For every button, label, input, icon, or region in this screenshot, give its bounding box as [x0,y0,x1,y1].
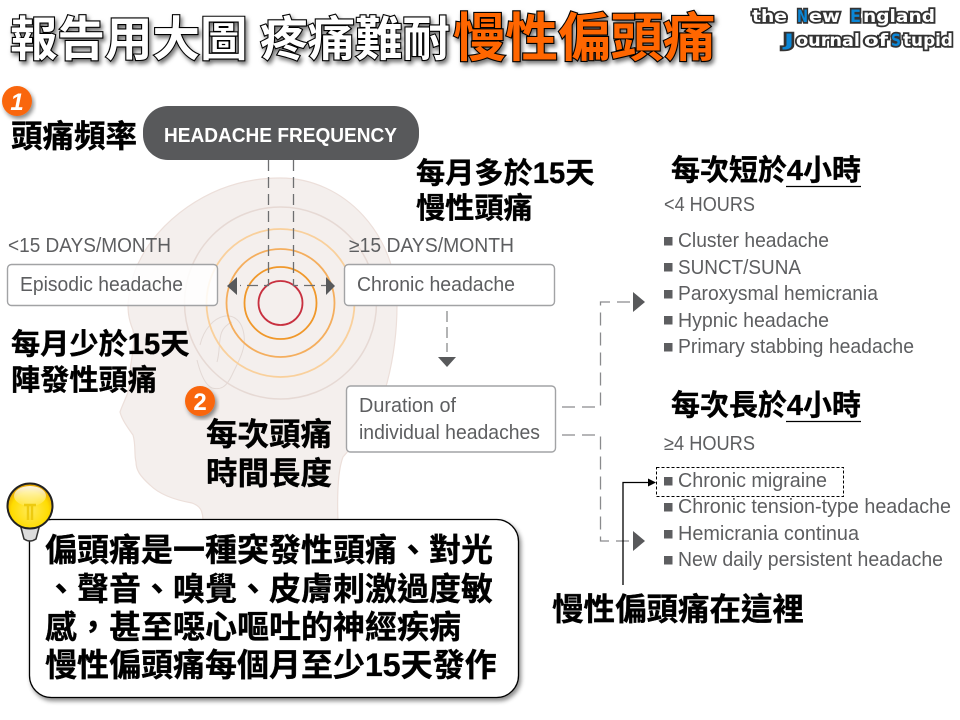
list: over 4 hours: ≥4 HOURS [664,433,755,455]
box: duration [346,386,556,452]
concentric pain circles [184,207,376,399]
list: under 4 hours: Primary stabbing headache [678,336,914,358]
list: under 4 hours: Hypnic headache [678,310,829,332]
badge 2 [185,386,215,416]
list: under 4 hours: Cluster headache [678,230,829,252]
label: duration zh: 時間長度 [206,455,332,491]
callout: migraine definition: 、聲音、嗅覺、皮膚刺激過度敏 [45,571,493,607]
label: duration zh [206,416,332,491]
title: 慢性偏頭痛 [453,9,716,68]
logo: the New England Journal of Stupid: E [850,7,861,27]
box: chronic headache: Chronic headache [357,274,515,296]
list: over 4 hours: New daily persistent headache [678,549,943,571]
label: more than 15 days: 每月多於15天 [416,157,594,190]
list: over 4 hours: Chronic migraine [678,470,827,492]
highlight: chronic migraine dashed box [656,468,844,496]
heading: over 4 hours: 每次長於4小時 [671,389,861,422]
arrow: chronic to duration [438,311,456,367]
callout: migraine definition: 感，甚至噁心嘔吐的神經疾病 [45,609,461,645]
label: at least 15 days/month: ≥15 DAYS/MONTH [349,235,514,257]
logo: the New England Journal of Stupid: ournal [796,31,860,51]
arrow: pointer to chronic migraine [623,478,656,585]
title [10,9,716,68]
box: chronic headache [344,264,554,306]
ear outline [197,316,244,389]
label: episodic zh [11,328,189,397]
title: 疼痛難耐 [260,14,450,67]
badge 1: 1 [10,89,24,116]
head silhouette [120,178,397,522]
list: under 4 hours: <4 HOURS [664,194,755,216]
pill: headache frequency [143,106,419,160]
list: under 4 hours: SUNCT/SUNA [678,257,802,279]
icon: light bulb [8,484,52,541]
arrow: duration to under 4 hours [562,292,645,407]
callout: migraine definition: 偏頭痛是一種突發性頭痛、對光 [45,532,493,568]
callout: migraine definition: 慢性偏頭痛每個月至少15天發作 [45,647,497,683]
list: over 4 hours [664,433,951,571]
label: more than 15 days [416,157,594,225]
badge 1 [2,86,32,116]
label: headache frequency zh: 頭痛頻率 [11,118,137,154]
logo: the New England Journal of Stupid: J [782,31,794,51]
frequency dashed connectors and arrows [227,160,335,295]
label: duration zh: 每次頭痛 [206,416,332,452]
logo: the New England Journal of Stupid: ew [809,7,840,27]
label: episodic zh: 陣發性頭痛 [11,364,157,397]
list: under 4 hours: Paroxysmal hemicrania [678,283,879,305]
logo: the New England Journal of Stupid: of [864,31,889,51]
logo: the New England Journal of Stupid: ngland [863,7,935,27]
label: episodic zh: 每月少於15天 [11,328,189,361]
title: 報告用大圖 [10,14,248,67]
label: chronic migraine here: 慢性偏頭痛在這裡 [552,591,804,627]
list: under 4 hours [664,194,914,358]
label: more than 15 days: 慢性頭痛 [416,192,533,225]
logo: the New England Journal of Stupid [752,7,953,51]
box: episodic headache: Episodic headache [20,274,183,296]
box: episodic headache [8,264,218,306]
logo: the New England Journal of Stupid: the [752,7,787,27]
list: over 4 hours: Hemicrania continua [678,523,860,545]
arrow: duration to over 4 hours [562,435,645,551]
callout: migraine definition [30,520,518,698]
box: duration: individual headaches [359,422,540,444]
badge 2: 2 [193,389,207,416]
logo: the New England Journal of Stupid: S [891,31,901,51]
list: over 4 hours: Chronic tension-type headache [678,496,951,518]
box: duration: Duration of [359,395,456,417]
label: less than 15 days/month: <15 DAYS/MONTH [8,235,171,257]
logo: the New England Journal of Stupid: N [797,7,808,27]
heading: under 4 hours: 每次短於4小時 [671,154,861,187]
pill: headache frequency: HEADACHE FREQUENCY [164,125,398,147]
logo: the New England Journal of Stupid: tupid [903,31,953,51]
